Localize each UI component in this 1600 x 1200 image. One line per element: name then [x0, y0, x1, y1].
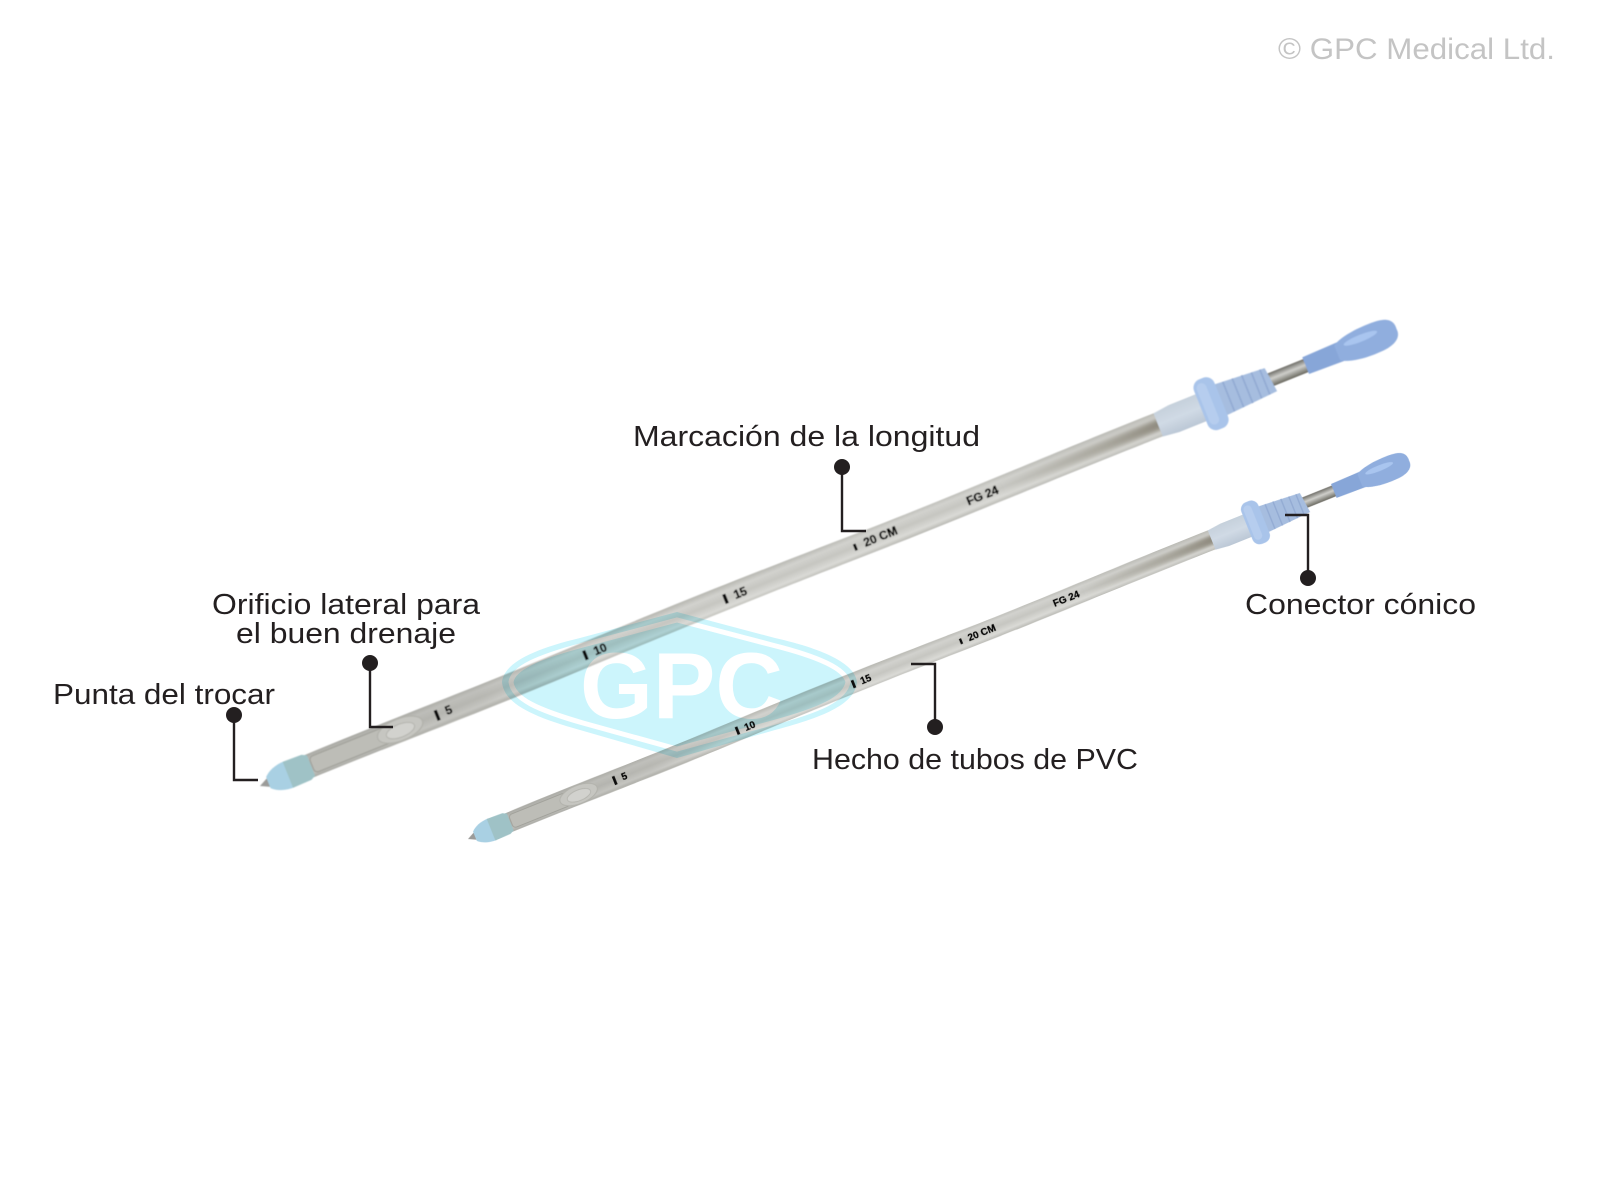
- label text: [212, 589, 481, 650]
- leader line: [911, 664, 935, 727]
- tube body: [502, 524, 1229, 834]
- tube body: [301, 406, 1179, 779]
- leader line: [1285, 515, 1308, 578]
- flange: [1239, 498, 1272, 547]
- callout: Orificio lateral: [212, 589, 481, 727]
- blue band: [283, 752, 316, 788]
- logo badge: [502, 612, 857, 758]
- tube shading near tip: [503, 724, 733, 833]
- ribbed conical connector: [1209, 363, 1279, 418]
- leader dot: [226, 707, 242, 723]
- callout: Punta del trocar: [53, 679, 275, 780]
- length mark 20 CM: [851, 524, 899, 554]
- leader line: [234, 715, 258, 780]
- length mark 20 CM: [958, 623, 998, 647]
- length mark 20 CM: 20 CM: [966, 623, 998, 644]
- length mark 10: 10: [743, 719, 758, 734]
- length mark 15: [850, 673, 874, 690]
- length mark 5: 5: [620, 771, 630, 783]
- leader dot: [927, 719, 943, 735]
- flange: [1191, 375, 1231, 433]
- side drainage hole: [374, 711, 426, 749]
- leader line: [842, 467, 866, 531]
- large trocar catheter: [250, 304, 1407, 811]
- blue pull ring: [1300, 315, 1402, 380]
- inner sheath window: [508, 792, 570, 828]
- metal rod: [1300, 485, 1338, 509]
- side drainage hole: [557, 779, 600, 810]
- length mark 15: 15: [859, 673, 874, 687]
- label text: Conector cónico: [1245, 589, 1476, 621]
- label text: Marcación de la longitud: [633, 421, 980, 453]
- inner core near handle: [1000, 414, 1176, 493]
- logo letters: GPC: [580, 633, 783, 738]
- label text: Orificio lateral para: [212, 589, 481, 621]
- length mark 5: 5: [443, 702, 455, 718]
- length mark 10: 10: [591, 640, 609, 658]
- label text: Hecho de tubos de PVC: [812, 744, 1138, 776]
- blue band: [487, 811, 515, 840]
- callout: Conector cónico: [1245, 515, 1476, 621]
- ribbed conical connector: [1254, 489, 1311, 534]
- metal rod: [1265, 358, 1311, 387]
- callout: Hecho de tubos de PVC: [812, 664, 1138, 776]
- small trocar catheter: [460, 440, 1418, 860]
- size mark FG 24: FG 24: [1052, 589, 1082, 610]
- blue cone tip: [263, 761, 295, 796]
- leader line: [370, 663, 393, 727]
- size mark FG 24: FG 24: [964, 483, 1001, 508]
- white sleeve: [1207, 512, 1258, 551]
- length mark 15: [721, 584, 749, 606]
- length mark 5: [611, 771, 630, 786]
- leader dot: [362, 655, 378, 671]
- length mark 10: [581, 640, 609, 662]
- white sleeve: [1153, 391, 1214, 438]
- length mark 20 CM: 20 CM: [861, 524, 899, 550]
- leader dot: [1300, 570, 1316, 586]
- length mark 10: [734, 719, 758, 737]
- trocar metal tip: [258, 776, 273, 792]
- GPC watermark logo: [502, 612, 857, 758]
- copyright notice: © GPC Medical Ltd.: [1278, 33, 1555, 66]
- label text: Punta del trocar: [53, 679, 275, 711]
- label text: el buen drenaje: [236, 618, 456, 650]
- leader dot: [834, 459, 850, 475]
- length mark 5: [433, 702, 455, 722]
- inner core near handle: [1081, 531, 1226, 596]
- trocar metal tip: [466, 831, 479, 844]
- length mark 15: 15: [732, 584, 749, 602]
- blue pull ring: [1329, 449, 1414, 503]
- inner sheath window: [309, 727, 391, 773]
- logo inner ring: [511, 620, 848, 749]
- blue cone tip: [471, 818, 497, 847]
- callout: Marcación de la longitud: [633, 421, 980, 531]
- tube shading near tip: [302, 648, 580, 779]
